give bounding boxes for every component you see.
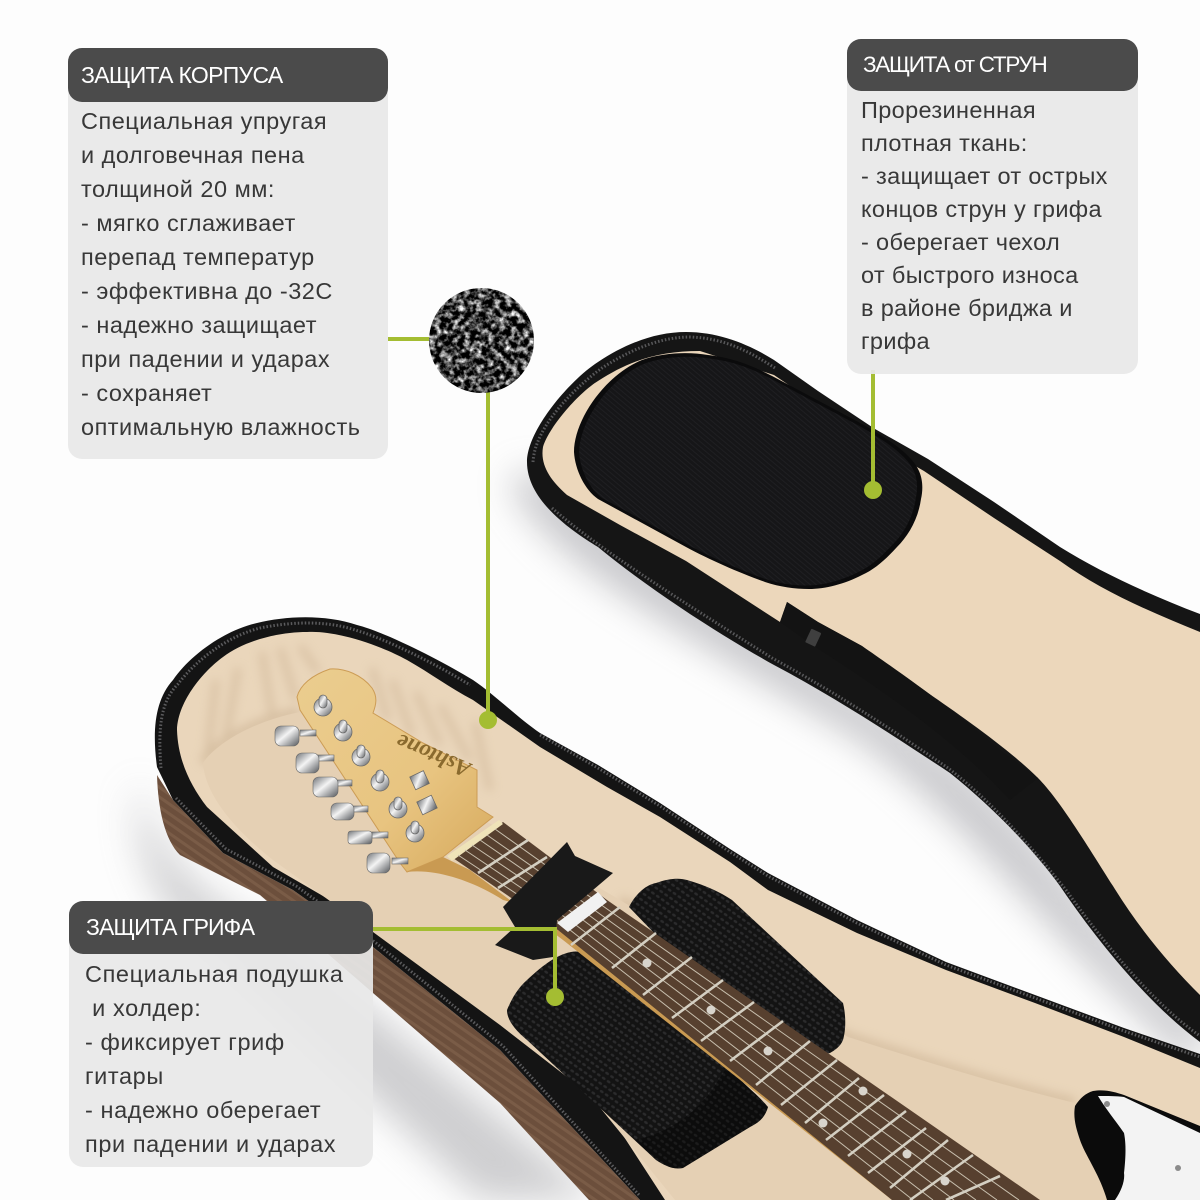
- upper cushion: [629, 879, 845, 1060]
- wall folds: [203, 646, 1075, 1103]
- guitar headstock: Ashtone: [392, 729, 476, 783]
- heading: neck protection: ЗАЩИТА ГРИФА: [86, 914, 254, 940]
- case floor: [203, 712, 1107, 1200]
- connector: neck protection: [372, 929, 564, 1006]
- heading: body protection: [68, 48, 388, 102]
- neck holder strap: [495, 842, 613, 960]
- black zipper edge: [155, 617, 1200, 1200]
- panel: string protection: [847, 39, 1138, 374]
- text: body protection details: Специальная упругая и долговечная пена толщиной 20 мм: - мягко сглаживает перепад температур - эффективна до -32С - надежно защищает при падении и ударах - сохраняет оптимальную влажность: [81, 108, 360, 440]
- guitar headstock: [275, 669, 493, 873]
- neck cushion: [507, 879, 845, 1168]
- soft shadows under the case: [136, 470, 1200, 1200]
- connector: string protection: [864, 370, 882, 499]
- connector: body protection: [388, 339, 497, 729]
- heading: string protection: [847, 39, 1138, 91]
- text: neck protection details: Специальная подушка и холдер: - фиксирует гриф гитары - надежно оберегает при падении и ударах: [85, 961, 344, 1157]
- padded cream wall: [177, 632, 1200, 1200]
- lower cushion: [507, 952, 768, 1168]
- heading: neck protection: [69, 901, 373, 954]
- text: string protection details: Прорезиненная плотная ткань: - защищает от острых концов струн у грифа - оберегает чехол от быстрого износа в районе бриджа и грифа: [861, 97, 1108, 354]
- lid: zip pocket tab: [780, 602, 1038, 800]
- lid: string protection patch: [574, 353, 922, 589]
- foam sample circle: [429, 288, 534, 393]
- lid of the case: [527, 332, 1200, 1042]
- panel: neck protection: [69, 901, 373, 1167]
- panel: body protection: [68, 48, 388, 459]
- guitar neck and fretboard: [407, 820, 1040, 1200]
- heading: body protection: ЗАЩИТА КОРПУСА: [81, 62, 283, 88]
- guitar body: [1074, 1090, 1200, 1200]
- lower case body: [155, 617, 1200, 1200]
- heading: string protection: ЗАЩИТА от СТРУН: [863, 52, 1046, 77]
- brown outer shell: [157, 775, 640, 1200]
